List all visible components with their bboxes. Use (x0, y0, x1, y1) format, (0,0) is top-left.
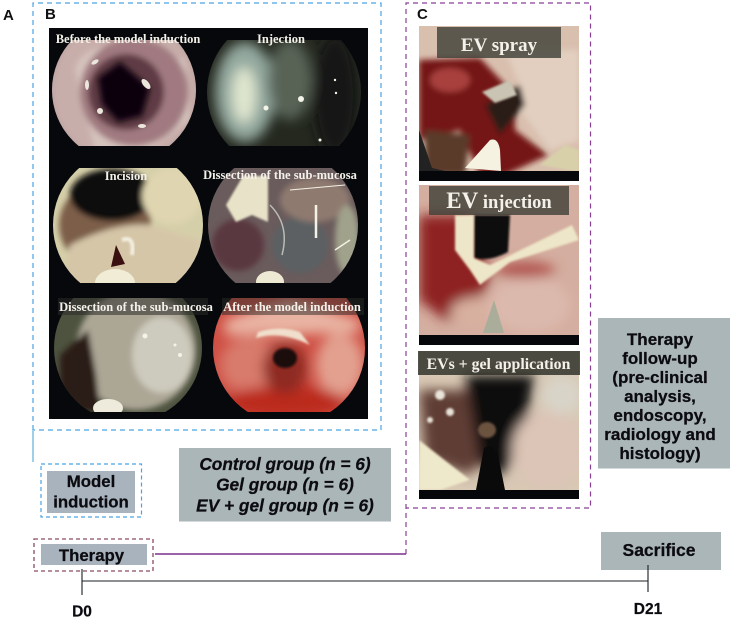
caption: after the model induction: After the model induction (223, 300, 361, 314)
panel C frame (406, 3, 590, 554)
caption: incision: Incision (105, 169, 147, 183)
label bar: EV injection (429, 186, 569, 215)
therapy connector line (155, 553, 406, 555)
panel label A: A (3, 7, 14, 24)
label bar: EV injection: EV injection (446, 188, 552, 213)
box: study groups: EV + gel group (n = 6) (196, 496, 374, 516)
photo: EV injection (419, 185, 579, 345)
connector from panel B to model induction (32, 430, 34, 462)
label bar: EVs + gel application (418, 351, 580, 375)
photo: EV spray (419, 26, 579, 181)
photo: EVs + gel application (418, 351, 584, 499)
box: therapy follow-up: analysis, (624, 387, 696, 406)
timeline (72, 565, 663, 619)
panel B frame (33, 3, 381, 430)
box: therapy follow-up: (pre-clinical (612, 368, 708, 387)
box: study groups: Control group (n = 6) (199, 454, 371, 474)
caption: dissection of the sub-mucosa, right: Dissection of the sub-mucosa (203, 168, 358, 182)
caption bands (58, 298, 208, 315)
box: sacrifice: Sacrifice (623, 540, 696, 560)
box: model induction: induction (53, 492, 129, 512)
caption: before the model induction: Before the model induction (56, 32, 200, 46)
box: therapy: Therapy (59, 546, 125, 565)
box: model induction: Model (67, 472, 115, 491)
photo: after the model induction (213, 298, 365, 412)
photo: injection (207, 40, 361, 146)
box: therapy follow-up: follow-up (622, 349, 698, 368)
box: therapy follow-up: endoscopy, (613, 406, 707, 425)
box: sacrifice (601, 532, 721, 570)
box: study groups: Gel group (n = 6) (216, 474, 354, 494)
box: model induction (41, 464, 142, 517)
box: therapy follow-up: histology) (619, 444, 701, 463)
panel C: therapy endoscopy (406, 3, 590, 554)
label bar: EV spray: EV spray (461, 35, 538, 56)
label bar: EVs + gel application: EVs + gel application (427, 356, 571, 373)
caption: dissection of the sub-mucosa, left: Dissection of the sub-mucosa (59, 300, 214, 314)
box: study groups (179, 448, 391, 522)
box: therapy (34, 539, 153, 571)
label bar: EV spray (437, 27, 561, 58)
box: therapy follow-up (598, 318, 730, 468)
label D21: D21 (634, 601, 663, 618)
photo: dissection of the sub-mucosa (208, 168, 358, 283)
box: therapy follow-up: Therapy (627, 330, 694, 349)
box: therapy follow-up: radiology and (604, 425, 716, 444)
panel B label: B (45, 6, 56, 23)
panel C label: C (417, 6, 428, 23)
photo: incision (53, 168, 203, 283)
panel B: model induction endoscopy (33, 3, 381, 430)
photo: before the model induction (52, 40, 196, 146)
caption: injection: Injection (257, 32, 305, 46)
endoscopy image grid (49, 15, 368, 425)
photo: dissection of the sub-mucosa (second) (54, 298, 202, 412)
